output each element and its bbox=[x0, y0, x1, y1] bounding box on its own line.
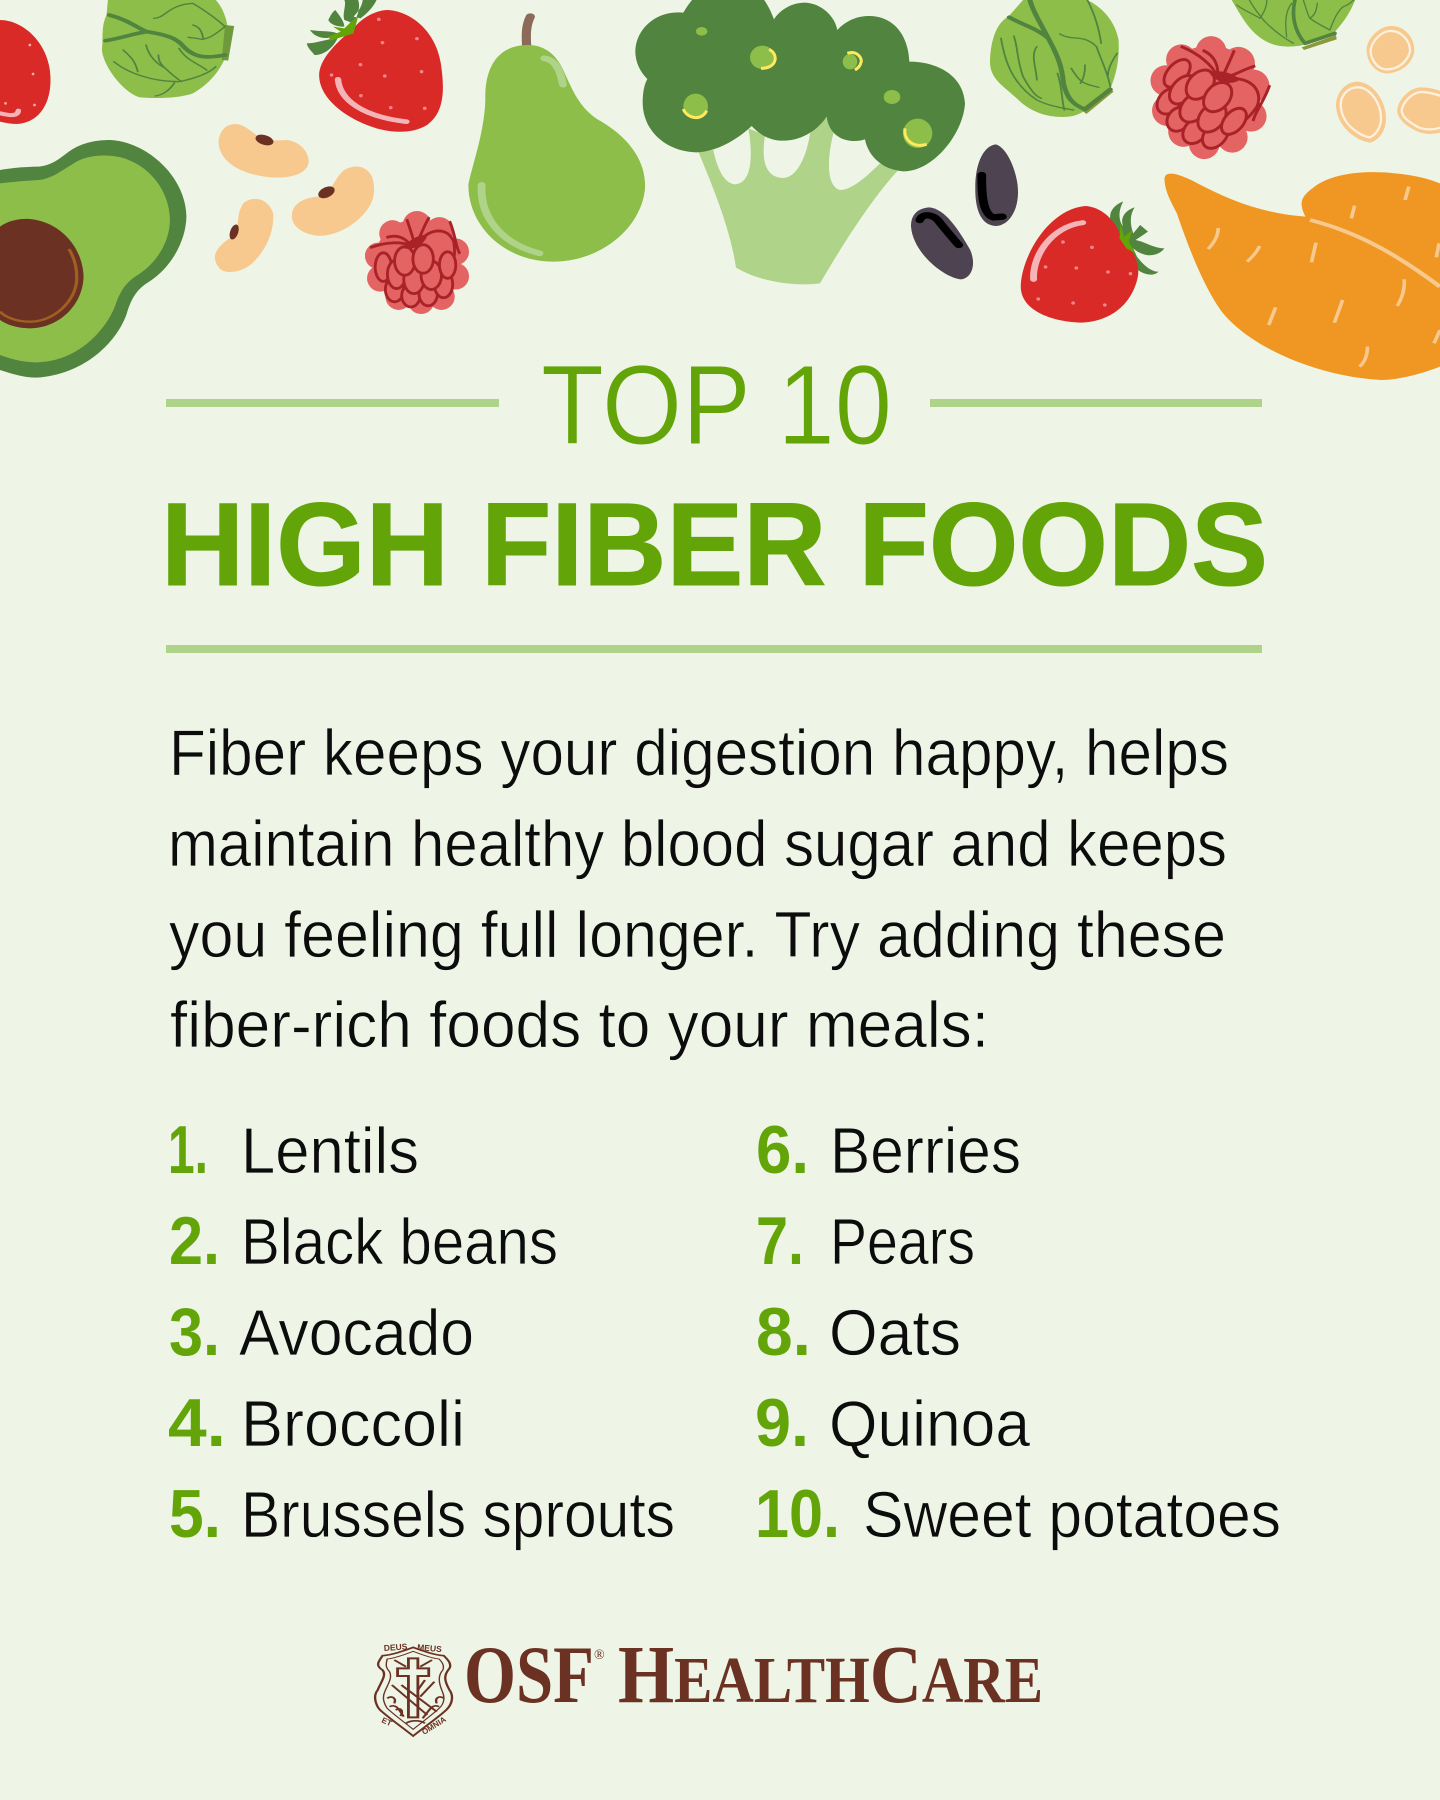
list: foods 6 to 10: 9. bbox=[755, 1385, 809, 1461]
icon: raspberry right bbox=[1125, 11, 1294, 180]
list: foods 1 to 5: Broccoli bbox=[241, 1387, 465, 1460]
list: foods 6 to 10: 8. bbox=[756, 1294, 811, 1370]
logo: OSF HealthCare bbox=[375, 1628, 1043, 1737]
wordmark HealthCare: HEALTHCARE bbox=[618, 1628, 1043, 1720]
icon: white beans bbox=[215, 124, 374, 272]
list: foods 1 to 5 bbox=[168, 1112, 675, 1552]
icon: broccoli bbox=[635, 0, 965, 284]
intro paragraph: fiber-rich foods to your meals: bbox=[170, 988, 989, 1061]
icon: raspberry left bbox=[365, 211, 469, 314]
heading rule bottom bbox=[166, 645, 1262, 653]
list: foods 1 to 5: Black beans bbox=[241, 1205, 558, 1278]
list: foods 6 to 10: 10. bbox=[755, 1476, 840, 1552]
icon: black beans bbox=[911, 144, 1018, 279]
list: foods 6 to 10: Quinoa bbox=[829, 1387, 1031, 1460]
icon: avocado half bbox=[0, 140, 186, 378]
intro paragraph: you feeling full longer. Try adding these bbox=[169, 898, 1226, 971]
icon: strawberry bbox=[307, 0, 443, 132]
icon: quinoa seeds bbox=[1336, 26, 1440, 143]
icon: sweet potato bbox=[1164, 172, 1440, 380]
intro paragraph bbox=[168, 716, 1229, 1061]
list: foods 1 to 5: 3. bbox=[169, 1294, 220, 1370]
list: foods 6 to 10 bbox=[755, 1112, 1281, 1552]
intro paragraph: Fiber keeps your digestion happy, helps bbox=[169, 716, 1229, 789]
icon: cut-off strawberry top left bbox=[0, 20, 51, 124]
title: high fiber foods: HIGH FIBER FOODS bbox=[161, 479, 1268, 611]
list: foods 6 to 10: Berries bbox=[830, 1114, 1021, 1187]
wordmark OSF: OSF bbox=[464, 1629, 594, 1720]
crest motto bottom left: ET bbox=[380, 1716, 393, 1728]
icon: strawberry right bbox=[1021, 201, 1164, 323]
list: foods 1 to 5: Lentils bbox=[241, 1114, 419, 1187]
crest motto top right: MEUS bbox=[417, 1642, 442, 1654]
list: foods 6 to 10: Sweet potatoes bbox=[863, 1478, 1281, 1551]
icon: brussels sprout center bbox=[990, 0, 1119, 117]
list: foods 1 to 5: 1. bbox=[168, 1112, 208, 1188]
list: foods 1 to 5: Brussels sprouts bbox=[241, 1478, 675, 1551]
illustration band: fiber foods bbox=[0, 0, 1440, 380]
icon: crest shield bbox=[375, 1647, 452, 1736]
list: foods 1 to 5: Avocado bbox=[239, 1296, 474, 1369]
list: foods 6 to 10: Pears bbox=[830, 1205, 975, 1278]
list: foods 1 to 5: 5. bbox=[169, 1476, 221, 1552]
crest motto top: DEUS bbox=[383, 1641, 408, 1653]
icon: brussels sprout top right bbox=[1232, 0, 1355, 50]
list: foods 6 to 10: 7. bbox=[756, 1203, 804, 1279]
heading rule right bbox=[930, 399, 1262, 407]
heading rule left bbox=[166, 399, 499, 407]
list: foods 1 to 5: 4. bbox=[168, 1385, 226, 1461]
registered mark: ® bbox=[594, 1648, 605, 1663]
list: foods 6 to 10: Oats bbox=[829, 1296, 961, 1369]
icon: pear bbox=[468, 17, 645, 262]
intro paragraph: maintain healthy blood sugar and keeps bbox=[168, 807, 1227, 880]
icon: brussels sprout left bbox=[102, 0, 234, 98]
list: foods 6 to 10: 6. bbox=[756, 1112, 809, 1188]
list: foods 1 to 5: 2. bbox=[169, 1203, 220, 1279]
crest motto bottom right: OMNIA bbox=[420, 1715, 448, 1737]
title: top 10: TOP 10 bbox=[541, 342, 892, 468]
